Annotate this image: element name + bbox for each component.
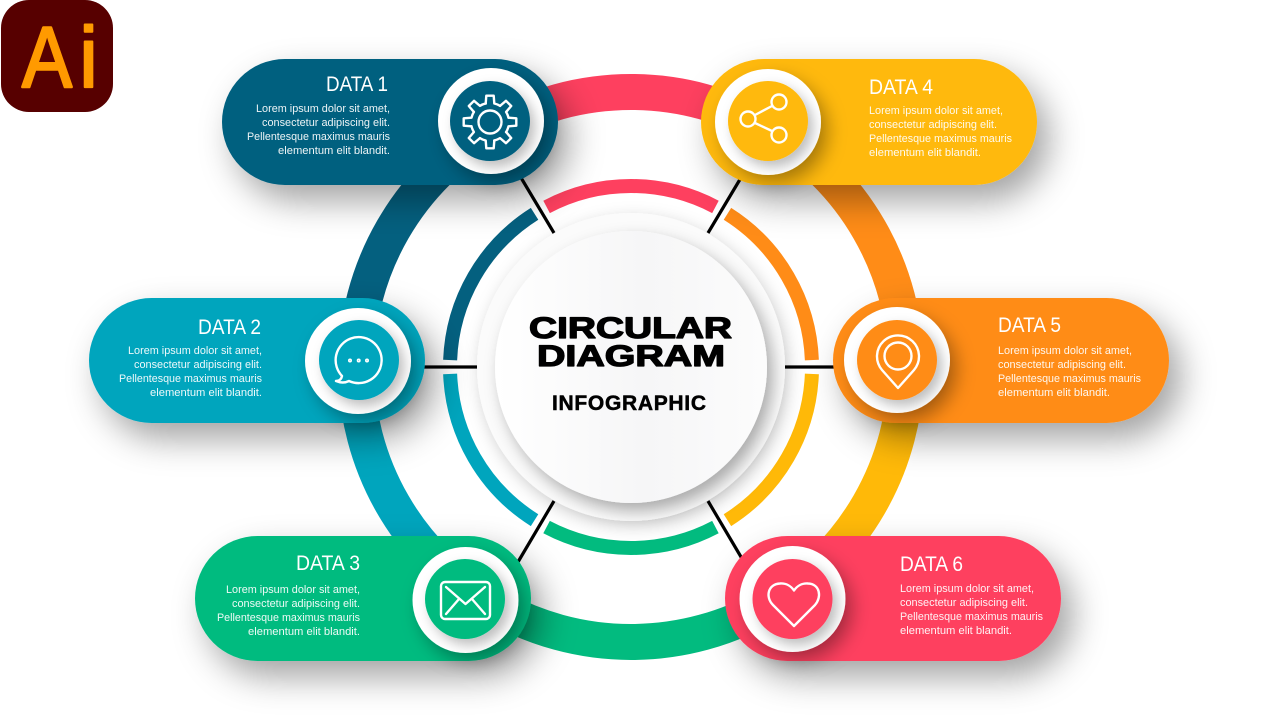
icon: heart [740, 546, 846, 652]
text: data 4: Pellentesque maximus mauris [869, 133, 1012, 145]
panel: data 6 [725, 536, 1061, 661]
text: data 2: consectetur adipiscing elit. [134, 359, 262, 371]
text: data 6: Lorem ipsum dolor sit amet, [900, 583, 1034, 595]
text: data 3: DATA 3 [296, 552, 360, 575]
text: data 5 [998, 314, 1141, 399]
text: data 5: consectetur adipiscing elit. [998, 359, 1126, 371]
text: data 6: elementum elit blandit. [900, 625, 1012, 637]
text: data 5: Lorem ipsum dolor sit amet, [998, 345, 1132, 357]
icon: share [715, 69, 821, 175]
text: data 1 [247, 73, 390, 157]
connector lines [420, 176, 840, 562]
center disc outer layer [477, 213, 785, 521]
panel: data 4 [701, 59, 1037, 185]
icon: Ai logo: i [79, 10, 98, 106]
panel: data 5 [833, 298, 1169, 423]
text: data 3: Lorem ipsum dolor sit amet, [226, 584, 360, 596]
text: data 2: DATA 2 [198, 316, 261, 339]
text: data 1: Pellentesque maximus mauris [247, 131, 390, 143]
center title: DIAGRAM [537, 340, 725, 373]
center title [529, 312, 732, 415]
icon: map pin [844, 307, 950, 413]
text: data 6: consectetur adipiscing elit. [900, 597, 1028, 609]
center title: CIRCULAR [529, 312, 732, 345]
text: data 1: DATA 1 [326, 73, 388, 96]
center title: INFOGRAPHIC [552, 392, 706, 415]
text: data 6 [900, 553, 1043, 637]
text: data 4: DATA 4 [869, 76, 933, 99]
panel: data 1 [222, 59, 558, 185]
text: data 3: Pellentesque maximus mauris [217, 612, 360, 624]
text: data 4: consectetur adipiscing elit. [869, 119, 997, 131]
text: data 6: DATA 6 [900, 553, 963, 576]
icon: envelope [412, 547, 518, 653]
text: data 2: Lorem ipsum dolor sit amet, [128, 345, 262, 357]
outer ring [255, 0, 1007, 720]
icon: Ai logo: A [22, 10, 73, 106]
text: data 6: Pellentesque maximus mauris [900, 611, 1043, 623]
text: data 3: consectetur adipiscing elit. [232, 598, 360, 610]
text: data 4 [869, 76, 1012, 159]
panel: data 3 [195, 536, 531, 661]
icon: chat bubble [305, 308, 411, 414]
inner ring [381, 117, 881, 617]
text: data 5: DATA 5 [998, 314, 1061, 337]
text: data 2 [119, 316, 262, 399]
icon: Ai logo [1, 0, 113, 112]
text: data 4: Lorem ipsum dolor sit amet, [869, 105, 1003, 117]
text: data 3 [217, 552, 360, 638]
text: data 1: Lorem ipsum dolor sit amet, [256, 103, 390, 115]
center disc [495, 231, 767, 503]
panel: data 2 [89, 298, 425, 423]
text: data 5: elementum elit blandit. [998, 387, 1110, 399]
text: data 1: consectetur adipiscing elit. [262, 117, 390, 129]
text: data 3: elementum elit blandit. [248, 626, 360, 638]
text: data 5: Pellentesque maximus mauris [998, 373, 1141, 385]
icon: gear [438, 68, 544, 174]
text: data 2: elementum elit blandit. [150, 387, 262, 399]
text: data 2: Pellentesque maximus mauris [119, 373, 262, 385]
text: data 1: elementum elit blandit. [278, 145, 390, 157]
text: data 4: elementum elit blandit. [869, 147, 981, 159]
